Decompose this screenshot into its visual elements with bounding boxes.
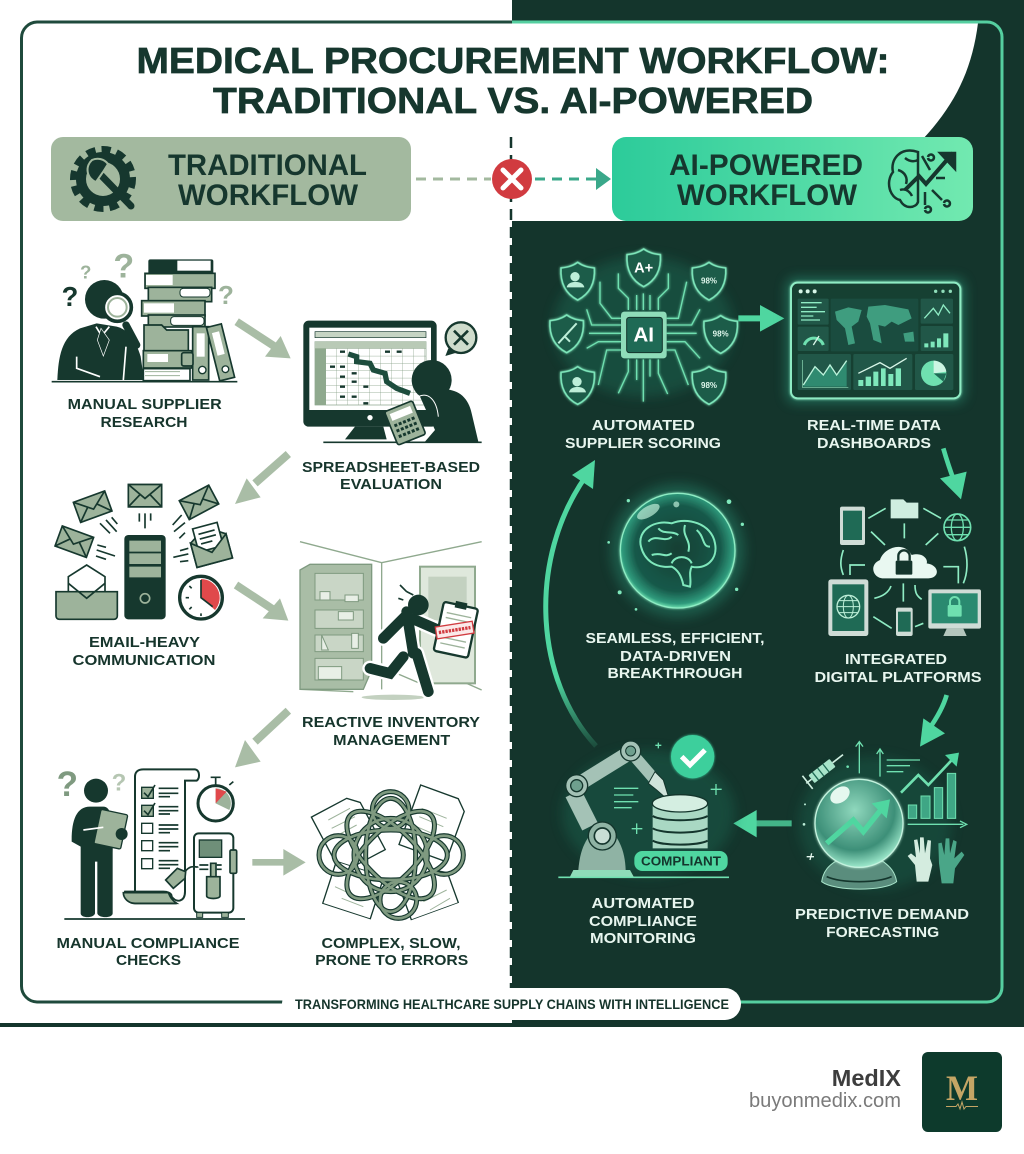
step: manual compliance checks <box>56 765 245 969</box>
step: manual supplier research: RESEARCH <box>100 414 188 431</box>
step: automated compliance monitoring: MONITORING <box>590 930 696 947</box>
icon: researcher with book stack: ? <box>62 281 78 312</box>
step: integrated digital platforms: DIGITAL PLATFORMS <box>814 669 982 686</box>
icon: AI chip with shields: A+ <box>634 260 653 276</box>
icon: person with checklist, stopwatch and machine: ? <box>112 770 126 797</box>
icon: brain in glowing sphere <box>607 484 744 617</box>
centre: seamless breakthrough: SEAMLESS, EFFICIENT, <box>586 630 764 647</box>
tagline pill <box>282 988 741 1020</box>
step: real-time data dashboards <box>787 278 965 452</box>
header: AI-powered workflow: AI-POWERED <box>669 149 863 182</box>
icon: gear and wrench <box>74 150 132 208</box>
icon: researcher with book stack <box>52 247 237 382</box>
brand name and URL <box>749 1065 901 1112</box>
logo: M <box>946 1068 978 1108</box>
title: TRADITIONAL VS. AI-POWERED <box>213 80 813 121</box>
icon: tangled loops over documents <box>311 785 468 920</box>
step: spreadsheet-based evaluation: SPREADSHEET-BASED <box>302 459 480 476</box>
icon: person with checklist, stopwatch and machine <box>57 765 245 919</box>
icon: glowing dashboard <box>787 278 965 403</box>
icon: crystal ball with chart, syringe, gloves <box>798 742 967 890</box>
step: email-heavy communication <box>55 484 232 669</box>
brand name and URL: buyonmedix.com <box>749 1090 901 1112</box>
bottom dark band <box>0 1023 512 1027</box>
icon: researcher with book stack: ? <box>218 280 234 310</box>
step: manual supplier research <box>52 247 237 431</box>
step: email-heavy communication: EMAIL-HEAVY <box>89 634 200 651</box>
step: email-heavy communication: COMMUNICATION <box>72 652 216 669</box>
arrow: spreadsheet to email <box>235 454 288 504</box>
step: complex, slow, prone to errors: COMPLEX, SLOW, <box>322 935 460 952</box>
brand name and URL: MedIX <box>832 1065 901 1091</box>
arrow: inventory to compliance <box>235 711 288 767</box>
icon: robot arm with database and compliant badge: COMPLIANT <box>641 855 721 869</box>
step: reactive inventory management <box>300 542 482 749</box>
step: spreadsheet-based evaluation <box>302 321 482 493</box>
step: automated compliance monitoring: COMPLIANCE <box>589 913 697 930</box>
step: automated compliance monitoring <box>558 735 735 947</box>
centre: seamless breakthrough: DATA-DRIVEN <box>620 648 731 665</box>
frame: right green outline <box>512 22 1002 1002</box>
centre: seamless breakthrough <box>586 484 764 682</box>
icon: running person by empty shelves <box>300 542 482 700</box>
step: reactive inventory management: REACTIVE INVENTORY <box>302 714 480 731</box>
header: AI-powered workflow <box>612 137 973 221</box>
header: traditional workflow: WORKFLOW <box>178 179 359 212</box>
frame: left dark outline <box>21 22 512 1002</box>
step: complex, slow, prone to errors: PRONE TO ERRORS <box>315 952 468 969</box>
icon: robot arm with database and compliant badge <box>558 735 735 877</box>
connector arrow with red X <box>416 159 611 199</box>
step: integrated digital platforms: INTEGRATED <box>845 651 947 668</box>
step: automated supplier scoring: AUTOMATED <box>592 417 695 434</box>
dark right half background <box>512 0 1024 1027</box>
step: automated supplier scoring <box>550 249 737 452</box>
step: predictive demand forecasting <box>795 742 969 941</box>
centre: seamless breakthrough: BREAKTHROUGH <box>608 665 742 682</box>
arrow: email to inventory <box>236 585 288 621</box>
header: AI-powered workflow: WORKFLOW <box>677 179 858 212</box>
panel: AI-powered workflow steps <box>546 249 982 947</box>
step: automated supplier scoring: SUPPLIER SCORING <box>565 435 721 452</box>
icon: person with checklist, stopwatch and machine: ? <box>57 765 78 804</box>
step: complex, slow, prone to errors <box>311 785 468 969</box>
arrow: compliance to outcome <box>252 849 306 876</box>
step: manual compliance checks: MANUAL COMPLIANCE <box>56 935 240 952</box>
icon: AI chip with shields: AI <box>633 324 654 347</box>
tagline pill: TRANSFORMING HEALTHCARE SUPPLY CHAINS WITH INTELLIGENCE <box>295 996 729 1012</box>
step: real-time data dashboards: REAL-TIME DATA <box>807 417 941 434</box>
icon: AI chip with shields <box>550 249 737 404</box>
step: real-time data dashboards: DASHBOARDS <box>817 435 931 452</box>
step: predictive demand forecasting: PREDICTIVE DEMAND <box>795 906 969 923</box>
icon: AI chip with shields: 98% <box>713 330 729 339</box>
title <box>136 40 890 121</box>
icon: emails around a server with clock <box>55 484 232 619</box>
icon: AI chip with shields: 98% <box>701 381 717 390</box>
step: manual compliance checks: CHECKS <box>116 952 181 969</box>
icon: researcher with book stack: ? <box>80 261 91 282</box>
title: MEDICAL PROCUREMENT WORKFLOW: <box>136 40 890 81</box>
icon: AI chip with shields: 98% <box>701 276 717 285</box>
arrow: platforms to forecasting <box>920 695 947 747</box>
panel: traditional workflow steps <box>52 247 482 969</box>
step: manual supplier research: MANUAL SUPPLIER <box>68 396 222 413</box>
white header panel with curved edge <box>512 23 978 221</box>
icon: gloves <box>908 837 964 883</box>
arrow: dashboards to platforms <box>940 448 967 499</box>
step: integrated digital platforms <box>814 499 982 686</box>
logo <box>922 1052 1002 1132</box>
arrow: scoring to dashboards <box>738 305 784 332</box>
header: traditional workflow: TRADITIONAL <box>168 149 367 182</box>
icon: monitor spreadsheet with worried user <box>303 321 482 445</box>
step: spreadsheet-based evaluation: EVALUATION <box>340 476 442 493</box>
arrow: research to spreadsheet <box>237 322 291 358</box>
icon: brain with rising arrow <box>889 151 955 212</box>
step: reactive inventory management: MANAGEMENT <box>333 732 450 749</box>
step: predictive demand forecasting: FORECASTING <box>826 924 939 941</box>
icon: researcher with book stack: ? <box>113 247 134 285</box>
header: traditional workflow <box>51 137 411 221</box>
arrow: curved return to supplier scoring <box>546 460 596 746</box>
arrow: forecasting to compliance <box>733 810 792 837</box>
centre dashed divider <box>510 137 512 1002</box>
icon: cloud network with devices <box>828 499 981 636</box>
step: automated compliance monitoring: AUTOMATED <box>592 895 695 912</box>
